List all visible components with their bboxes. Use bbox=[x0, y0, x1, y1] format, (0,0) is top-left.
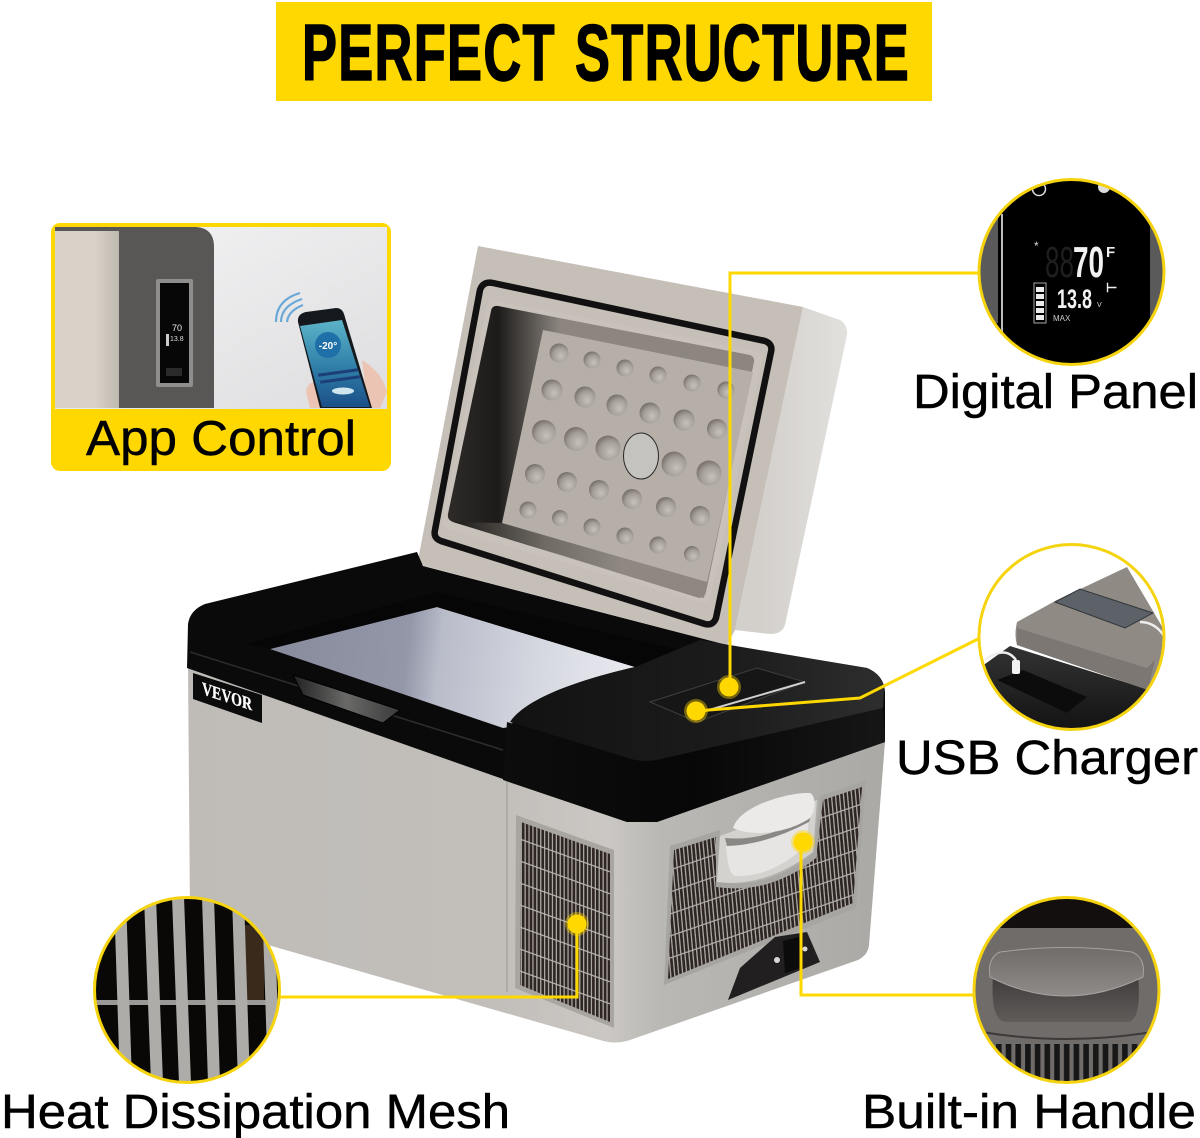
icon: battery gauge bbox=[1034, 283, 1046, 323]
text: Built-in Handle: Built-in Handle bbox=[862, 1086, 1196, 1138]
lid centre metal disc bbox=[624, 433, 658, 479]
callout: heat dissipation mesh bbox=[90, 893, 285, 1088]
callout: digital panel bbox=[975, 175, 1170, 370]
icon: hand bbox=[306, 360, 387, 408]
callout: digital panel: * bbox=[1034, 239, 1039, 253]
cooler cavity bbox=[270, 607, 635, 728]
icon: smartphone app bbox=[298, 308, 372, 408]
control block top bbox=[510, 640, 884, 761]
title bbox=[276, 2, 932, 101]
callout: digital panel: 13.8 bbox=[1057, 284, 1092, 314]
leader: digital panel bbox=[717, 273, 980, 699]
callout: digital panel: 70 bbox=[1073, 238, 1104, 287]
vent mesh: side bbox=[664, 780, 866, 985]
cooler side with display: 70 bbox=[172, 323, 182, 333]
callout: digital panel: V bbox=[1097, 302, 1102, 309]
callout: digital panel: 88 bbox=[1045, 238, 1074, 287]
handle bbox=[717, 793, 817, 883]
text: Digital Panel: Digital Panel bbox=[913, 366, 1198, 419]
callout: digital panel: MAX bbox=[1053, 314, 1071, 323]
lid inner tray bbox=[448, 306, 754, 598]
lid bbox=[419, 246, 847, 645]
control panel bbox=[650, 668, 805, 722]
black top bbox=[187, 552, 885, 822]
lid gasket bbox=[435, 283, 771, 624]
text: USB Charger: USB Charger bbox=[896, 732, 1198, 785]
power socket plate bbox=[728, 932, 820, 1000]
VEVOR badge bbox=[193, 673, 262, 723]
product: cooler bbox=[187, 246, 885, 1042]
icon: wireless signal bbox=[276, 293, 303, 322]
cooler side with display bbox=[55, 227, 214, 408]
text: Heat Dissipation Mesh: Heat Dissipation Mesh bbox=[1, 1086, 510, 1138]
text: App Control: App Control bbox=[86, 412, 356, 466]
leader: USB charger bbox=[684, 638, 980, 723]
grey body bbox=[188, 665, 885, 1042]
vent mesh: front bbox=[515, 815, 614, 1028]
cooler lid foam bbox=[55, 230, 119, 408]
callout: digital panel: ⊢ bbox=[1106, 280, 1117, 295]
icon: smartphone app: -20° bbox=[319, 341, 337, 352]
leader: heat dissipation mesh bbox=[280, 912, 589, 997]
callout: USB charger bbox=[975, 540, 1172, 735]
VEVOR badge: VEVOR bbox=[202, 678, 252, 715]
rim front edge bbox=[190, 652, 503, 750]
callout: built-in handle bbox=[970, 893, 1165, 1088]
rim handle notch bbox=[293, 675, 400, 723]
panel: app control bbox=[51, 223, 391, 471]
app photo background bbox=[55, 227, 387, 409]
leader: built-in handle bbox=[791, 830, 975, 995]
cooler side with display: 13.8 bbox=[170, 336, 184, 343]
callout: digital panel: F bbox=[1106, 244, 1115, 261]
control block front bbox=[503, 708, 885, 822]
lid dimples bbox=[520, 344, 734, 562]
